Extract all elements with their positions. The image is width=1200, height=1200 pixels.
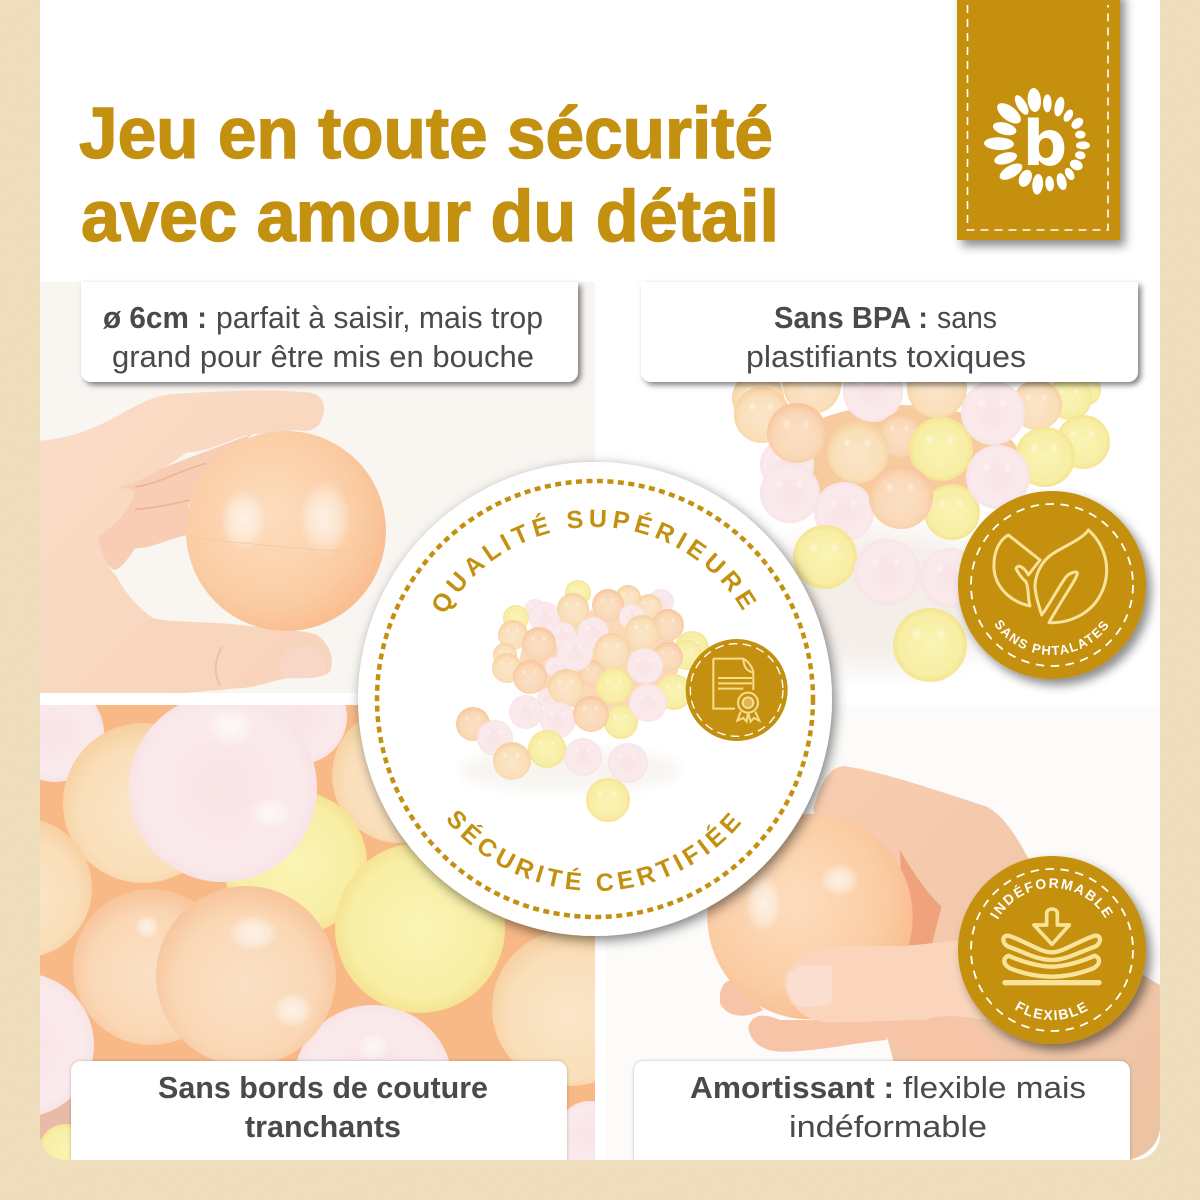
- caption: BPA: Sans BPA :: [774, 300, 928, 335]
- ball: [186, 431, 386, 631]
- photo: ball pile close up: [40, 705, 595, 1160]
- shadow between fingers: [900, 850, 942, 945]
- badge: sans phtalates: [956, 490, 1158, 692]
- back fingers: [97, 433, 253, 570]
- thumb nail: [787, 965, 832, 1007]
- photo: hand squeezing ball: [707, 766, 1160, 1160]
- caption: seams: Sans bords de couture: [158, 1070, 488, 1105]
- caption: seams: tranchants: [245, 1109, 401, 1144]
- badge text bottom: FLEXIBLE: [1015, 1001, 1088, 1020]
- badge text top: INDÉFORMABLE: [990, 878, 1114, 920]
- bottom edge: [40, 1160, 1160, 1163]
- badge text: SANS PHTALATES: [995, 620, 1108, 655]
- photo area: [0, 282, 1160, 1176]
- thumb: [783, 940, 987, 1023]
- title: Jeu en toute sécurité: [79, 94, 773, 174]
- title: [79, 94, 779, 257]
- caption: seams: [71, 1061, 567, 1160]
- badge: indéformable flexible: [956, 855, 1158, 1056]
- seal text top: QUALITÉ SUPÉRIEURE: [433, 510, 757, 612]
- logo letter: b: [1023, 107, 1067, 180]
- logo tag: [957, 0, 1120, 240]
- icon: compressed layers: [1003, 909, 1100, 983]
- back of hand: [813, 766, 1160, 1160]
- lower fingers: [720, 980, 888, 1052]
- title: avec amour du détail: [81, 177, 779, 257]
- caption: diameter: ø 6cm :: [103, 300, 207, 335]
- photo: hand holding ball: [40, 282, 595, 695]
- caption: diameter: grand pour être mis en bouche: [112, 339, 534, 374]
- icon: sunflower logo: [984, 87, 1090, 195]
- caption: diameter: [81, 282, 578, 382]
- photo: ball net bag: [732, 382, 1110, 682]
- caption: cushioning: flexible mais: [903, 1070, 1086, 1105]
- ball: [707, 814, 913, 1019]
- caption: BPA: [641, 282, 1138, 382]
- seal text bottom: SÉCURITÉ CERTIFIÉE: [448, 810, 742, 891]
- thumb nail: [280, 646, 327, 678]
- caption: diameter: parfait à saisir, mais trop: [216, 300, 543, 335]
- caption: cushioning: indéformable: [789, 1109, 987, 1144]
- caption: BPA: sans: [937, 300, 997, 335]
- icon: leaves: [994, 530, 1107, 623]
- icon: certificate: [686, 639, 788, 741]
- caption: BPA: plastifiants toxiques: [746, 339, 1026, 374]
- caption: cushioning: Amortissant :: [690, 1070, 894, 1105]
- caption: cushioning: [634, 1061, 1130, 1160]
- mini ball pile: [456, 580, 709, 822]
- hand and thumb: [40, 391, 332, 695]
- central seal: [352, 457, 844, 949]
